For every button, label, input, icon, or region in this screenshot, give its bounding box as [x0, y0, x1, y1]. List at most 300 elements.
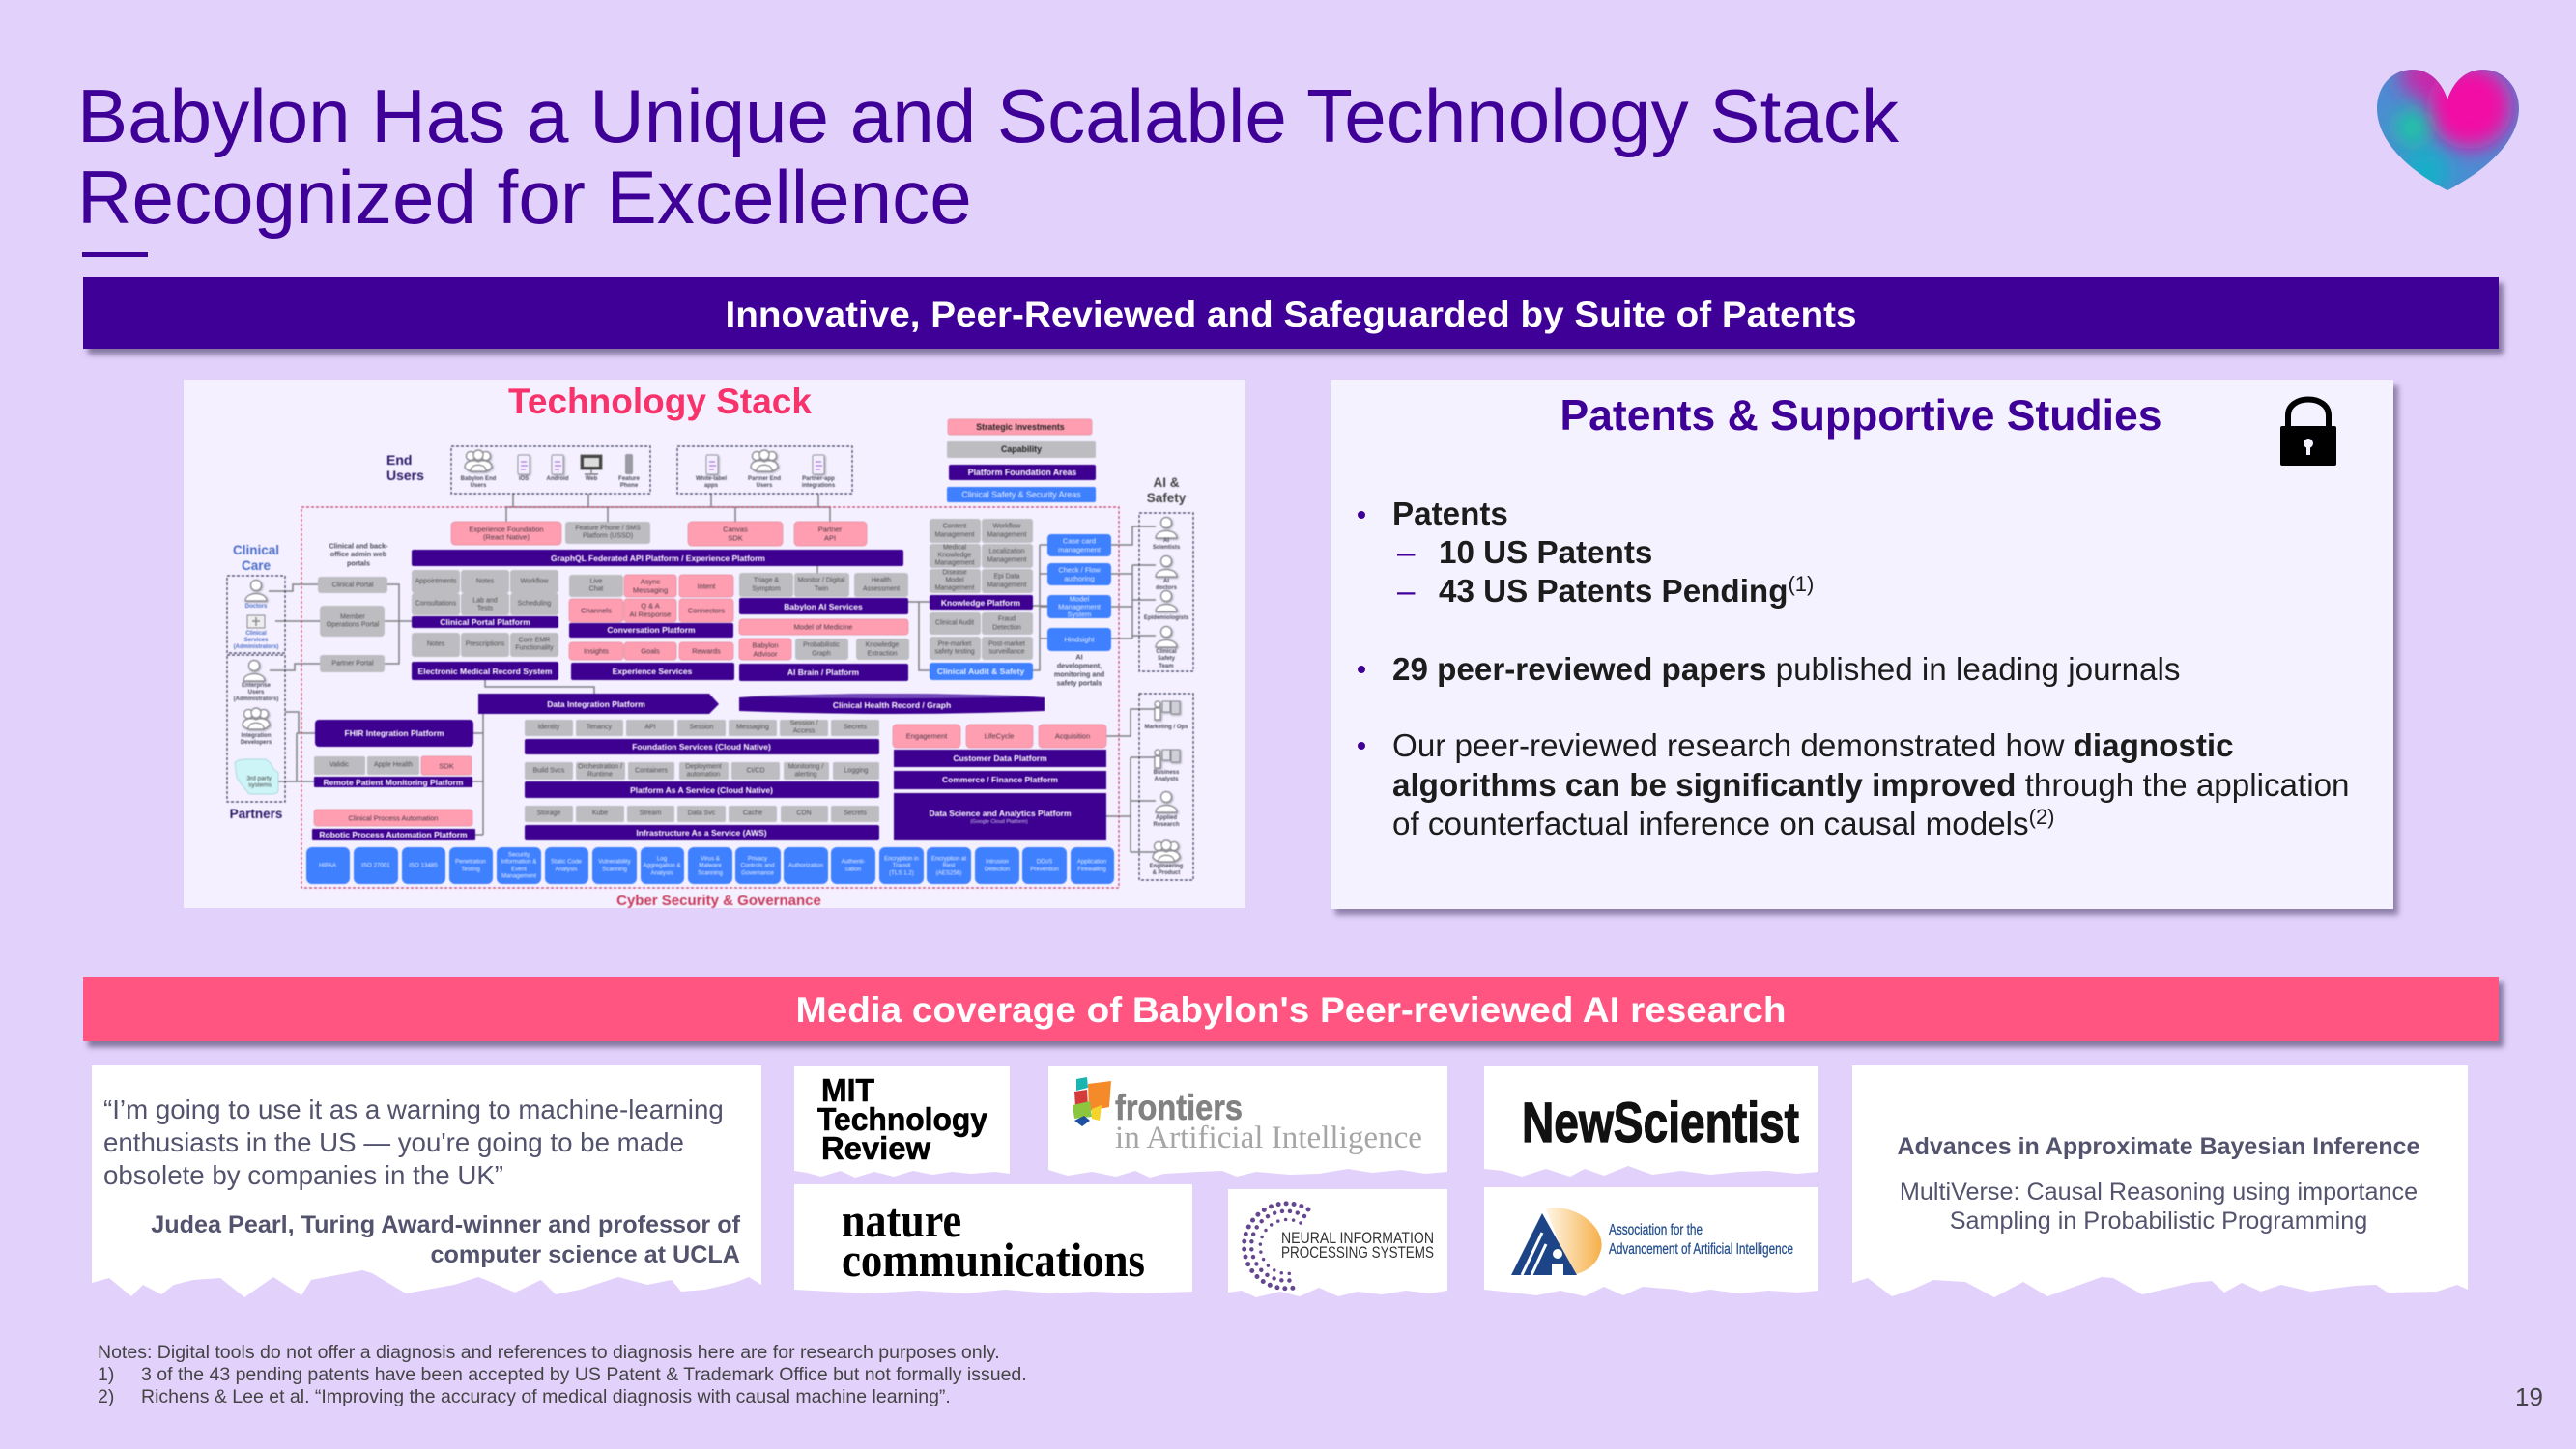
icon: clinical services — [234, 615, 278, 650]
cloud native services stack: automation — [687, 771, 720, 779]
customer data and analytics platforms — [893, 724, 1106, 840]
babylon AI services stack: Triage & — [754, 578, 779, 583]
cloud native services stack: Kube — [592, 810, 608, 817]
label: clinical care — [233, 543, 279, 573]
security and compliance row: Security — [508, 852, 530, 858]
customer data and analytics platforms: (Google Cloud Platform) — [970, 819, 1028, 825]
admin web portals: Clinical and back- — [329, 541, 388, 551]
security and compliance row: Privacy — [748, 856, 768, 862]
cloud native services stack: Identity — [538, 724, 560, 730]
cloud native services stack: Deployment — [685, 763, 722, 771]
knowledge platform stack: Fraud — [998, 616, 1016, 622]
connector lines — [269, 494, 1156, 852]
cloud native services stack: alerting — [795, 771, 817, 779]
knowledge platform stack: Management — [935, 585, 974, 591]
quote text: obsolete by companies in the UK” — [103, 1160, 503, 1190]
clinical portal platform stack: Appointments — [415, 578, 457, 585]
business users: Research — [1153, 822, 1180, 828]
security and compliance row: Authenti- — [842, 858, 865, 866]
knowledge platform stack: Clinical Audit & Safety — [937, 667, 1024, 676]
cloud native services stack: CI/CD — [746, 767, 765, 775]
quote text — [103, 1094, 724, 1190]
top platforms row — [412, 522, 903, 566]
clinical portal platform stack: Workflow — [521, 578, 549, 585]
cloud native services stack: Stream — [640, 810, 661, 817]
dashed group: babylon end users: Android — [547, 476, 569, 482]
dashed group: babylon end users — [451, 446, 650, 494]
card: Judea Pearl quote — [92, 1065, 761, 1297]
business users — [1139, 694, 1193, 880]
security and compliance row: Information & — [501, 858, 537, 866]
security and compliance row: HIPAA — [319, 862, 337, 869]
babylon AI services stack: AI Brain / Platform — [787, 668, 860, 677]
babylon AI services stack: Babylon — [752, 641, 779, 649]
AI development portals: development, — [1057, 661, 1102, 670]
knowledge platform stack: Management — [935, 560, 974, 566]
knowledge platform stack: Management — [987, 582, 1026, 589]
AI development portals: Hindsight — [1064, 636, 1096, 643]
dashed group: partner end users: integrations — [802, 483, 836, 489]
security and compliance row: Scanning — [698, 869, 723, 877]
dashed group: babylon end users: Web — [586, 476, 598, 482]
knowledge platform stack: Disease — [942, 570, 967, 576]
bullet: research — [1358, 728, 2350, 842]
clinical portal platform stack: Prescriptions — [466, 641, 505, 647]
AI and safety users: doctors — [1156, 585, 1178, 591]
cloud native services stack: CDN — [796, 810, 812, 817]
conversation platform stack: Insights — [584, 647, 609, 655]
security and compliance row: Management — [501, 873, 536, 879]
title accent rule — [82, 252, 148, 257]
security and compliance row: Rest — [943, 862, 956, 869]
top platforms row: GraphQL Federated API Platform / Experience Platform — [551, 554, 765, 563]
security and compliance row: Penetration — [455, 858, 486, 866]
babylon AI services stack: Monitor / Digital — [798, 578, 845, 583]
banner: media coverage — [83, 977, 2499, 1041]
security and compliance row: cation — [845, 866, 862, 873]
icon: enterprise users — [234, 661, 278, 702]
clinical care users — [227, 543, 285, 821]
dashed group: babylon end users: iOS — [519, 476, 529, 482]
knowledge platform stack: safety testing — [934, 649, 975, 655]
footnotes: Richens & Lee et al. “Improving the accuracy of medical diagnosis with causal machine learning”. — [141, 1386, 951, 1407]
cloud native services stack: Infrastructure As a Service (AWS) — [636, 828, 767, 838]
icon: integration developers: Developers — [241, 740, 272, 746]
security and compliance row: Malware — [699, 862, 722, 869]
dashed group: babylon end users: Users — [471, 483, 487, 489]
integration platforms: SDK — [439, 761, 454, 771]
security and compliance row: Detection — [985, 866, 1011, 873]
footnotes: 2) — [98, 1386, 114, 1407]
icon: enterprise users: Users — [248, 690, 265, 696]
data integration and health record: Clinical Health Record / Graph — [833, 700, 951, 710]
integration platforms: Apple Health — [374, 761, 413, 769]
clinical portal platform stack: Consultations — [415, 601, 457, 607]
conversation platform stack — [569, 575, 734, 680]
conversation platform stack: Connectors — [688, 607, 725, 614]
babylon AI services stack: Assessment — [863, 585, 900, 593]
knowledge platform stack: Localization — [989, 549, 1025, 554]
card: advances in approximate Bayesian inference — [1852, 1065, 2468, 1297]
AI development portals: AI — [1075, 653, 1083, 661]
customer data and analytics platforms: Commerce / Finance Platform — [942, 775, 1058, 784]
dashed group: partner end users: apps — [704, 483, 719, 489]
knowledge platform stack: Post-market — [988, 641, 1025, 647]
security and compliance row: Log — [657, 856, 668, 862]
security and compliance row: (TLS 1.2) — [889, 869, 914, 877]
AI and safety users: Epidemiologists — [1144, 615, 1189, 621]
security and compliance row: Encryption in — [884, 856, 919, 862]
conversation platform stack: Intent — [698, 582, 716, 591]
customer data and analytics platforms: Engagement — [906, 732, 948, 740]
bullet: patents: – — [1397, 535, 1416, 571]
conversation platform stack: Live — [590, 578, 603, 585]
logo: MIT Technology Review — [794, 1066, 1010, 1178]
babylon AI services stack: Knowledge — [866, 641, 899, 649]
admin web portals: Partner Portal — [331, 661, 374, 667]
cloud native services stack: Tenancy — [587, 724, 613, 730]
top platforms row: API — [824, 533, 836, 543]
cloud native services stack: Access — [793, 728, 816, 734]
icon: padlock — [2280, 400, 2336, 466]
cloud native services stack: Session — [690, 724, 714, 730]
label: AI and safety — [1147, 475, 1187, 505]
knowledge platform stack: Medical — [943, 545, 967, 551]
label: AI and safety: AI & — [1154, 475, 1180, 490]
cloud native services stack: Runtime — [587, 771, 613, 779]
icon: enterprise users: Enterprise — [242, 683, 271, 689]
top platforms row: SDK — [728, 533, 743, 543]
icon: integration developers — [241, 708, 272, 746]
security and compliance row: Prevention — [1030, 866, 1059, 873]
banner: innovative, peer-reviewed: Innovative, Peer-Reviewed and Safeguarded by Suite of Patents — [725, 295, 1857, 334]
clinical portal platform stack: Core EMR — [519, 638, 550, 643]
knowledge platform stack: Detection — [992, 624, 1021, 632]
clinical portal platform stack: Electronic Medical Record System — [418, 667, 553, 676]
data integration and health record: Data Integration Platform — [547, 699, 645, 709]
top platforms row: (React Native) — [483, 533, 530, 541]
logo: association for the advancement of artificial intelligence — [1484, 1187, 1818, 1296]
data integration and health record — [478, 694, 1045, 714]
babylon AI services stack: Symptom — [752, 585, 781, 593]
top platforms row: Partner — [818, 526, 843, 533]
logo: nature communications: communications — [842, 1233, 1145, 1287]
panel: technology stack diagram — [184, 380, 1245, 909]
security and compliance row: Scanning — [602, 866, 627, 873]
third party systems: systems — [248, 782, 272, 788]
panel: patents and supportive studies — [1331, 380, 2393, 909]
AI and safety users — [1139, 475, 1193, 671]
AI development portals: authoring — [1064, 574, 1095, 583]
AI development portals: Case card — [1063, 537, 1096, 545]
stack diagram — [227, 419, 1193, 909]
bullet: research: of counterfactual inference on causal models — [1392, 807, 2029, 842]
third party systems: 3rd party — [246, 775, 272, 782]
title: Recognized for Excellence — [77, 155, 972, 240]
knowledge platform stack: Workflow — [993, 524, 1021, 529]
clinical portal platform stack: Notes — [427, 641, 445, 647]
logo: neural information processing systems — [1228, 1189, 1447, 1297]
admin web portals — [318, 541, 388, 672]
page number: 19 — [2515, 1382, 2543, 1411]
bullet: patents: Patents — [1392, 497, 1508, 532]
security and compliance row: Encryption at — [931, 856, 966, 862]
AI development portals: Check / Flow — [1058, 566, 1101, 574]
banner: media coverage: Media coverage of Babylon's Peer-reviewed AI research — [796, 990, 1786, 1030]
card: advances in approximate Bayesian inference: Sampling in Probabilistic Programming — [1950, 1208, 2367, 1235]
integration platforms: Robotic Process Automation Platform — [319, 830, 468, 839]
bullet: patents: – — [1397, 574, 1416, 610]
cloud native services stack: Build Svcs — [533, 767, 565, 775]
logo: MIT Technology Review: Technology — [817, 1101, 988, 1137]
third party systems — [235, 759, 278, 794]
icon: Babylon gradient heart logo — [2377, 70, 2519, 190]
clinical portal platform stack: Lab and — [472, 597, 498, 605]
icon: doctors: Doctors — [245, 604, 268, 610]
AI development portals: Model — [1070, 595, 1090, 603]
dashed group: partner end users: Partner End — [748, 476, 781, 482]
knowledge platform stack — [930, 519, 1033, 680]
end users — [386, 446, 852, 494]
security and compliance row: Authorization — [788, 862, 824, 869]
cloud native services stack: Session / — [790, 721, 817, 726]
attribution: computer science at UCLA — [430, 1241, 740, 1268]
dashed group: partner end users — [677, 446, 852, 494]
attribution: Judea Pearl, Turing Award-winner and professor of — [151, 1211, 741, 1238]
label: end users: Users — [386, 468, 424, 483]
footnotes: Notes: Digital tools do not offer a diagnosis and references to diagnosis here are for research purposes only. — [98, 1342, 1000, 1363]
dashed group: babylon end users: Phone — [620, 483, 639, 489]
logo: New Scientist: NewScientist — [1522, 1092, 1799, 1154]
icon: clinical services: Clinical — [245, 631, 267, 637]
security and compliance row: Governance — [741, 869, 774, 877]
cloud native services stack: Secrets — [844, 810, 867, 817]
dashed group: babylon end users: Feature — [618, 476, 640, 482]
title — [77, 73, 1900, 240]
label: end users — [386, 452, 424, 483]
conversation platform stack: Channels — [581, 607, 612, 614]
dashed group: clinical care — [227, 576, 285, 653]
dashed group: partner end users: Users — [757, 483, 773, 489]
knowledge platform stack: Content — [943, 524, 966, 529]
logo: nature communications: nature — [842, 1193, 961, 1247]
conversation platform stack: Q & A — [641, 601, 660, 611]
label: AI and safety: Safety — [1147, 491, 1187, 505]
customer data and analytics platforms: Acquisition — [1055, 732, 1090, 740]
admin web portals: Operations Portal — [327, 622, 380, 628]
integration platforms — [312, 720, 475, 840]
cloud native services stack: Containers — [635, 767, 668, 775]
clinical portal platform stack: Functionality — [515, 645, 554, 651]
babylon AI services stack: Twin — [815, 585, 828, 593]
babylon AI services stack — [739, 573, 909, 681]
card: advances in approximate Bayesian inference: MultiVerse: Causal Reasoning using importance — [1900, 1179, 2418, 1206]
logo: nature communications — [794, 1184, 1192, 1293]
top platforms row: Feature Phone / SMS — [575, 526, 641, 531]
babylon AI services stack: Probabilistic — [803, 641, 840, 649]
knowledge platform stack: Model — [945, 578, 964, 583]
integration platforms: Validic — [329, 761, 350, 769]
security and compliance row: Aggregation & — [643, 862, 681, 869]
conversation platform stack: Messaging — [633, 585, 668, 595]
knowledge platform stack: Management — [987, 556, 1026, 564]
AI development portals: Management — [1058, 603, 1102, 611]
security and compliance row: Analysis — [650, 869, 673, 877]
cyber security dashed boundary — [301, 507, 1119, 888]
logo: neural information processing systems: PROCESSING SYSTEMS — [1281, 1243, 1434, 1262]
legend — [947, 419, 1096, 502]
security and compliance row: ISO 13485 — [409, 862, 438, 869]
heading: technology stack: Technology Stack — [508, 382, 812, 421]
banner: innovative, peer-reviewed — [83, 277, 2499, 349]
label: partners: Partners — [230, 807, 282, 821]
admin web portals: portals — [347, 558, 370, 568]
AI and safety users: Team — [1159, 664, 1174, 669]
knowledge platform stack: Epi Data — [994, 574, 1020, 580]
bullet: patents: 43 US Patents Pending — [1439, 574, 1788, 610]
AI and safety users: AI — [1163, 579, 1169, 584]
security and compliance row: (AES256) — [936, 869, 961, 877]
conversation platform stack: Goals — [641, 647, 660, 655]
knowledge platform stack: Knowledge — [938, 553, 971, 558]
AI development portals: monitoring and — [1054, 670, 1104, 678]
logo: association for the advancement of artificial intelligence: Association for the — [1609, 1222, 1703, 1238]
legend: Strategic Investments — [976, 422, 1065, 432]
cloud native services stack: Storage — [537, 810, 560, 817]
AI development portals: management — [1058, 545, 1102, 554]
security and compliance row: Analysis — [555, 866, 578, 873]
babylon AI services stack: Model of Medicine — [794, 622, 852, 632]
dashed group: partners — [227, 655, 285, 802]
logo: neural information processing systems: NEURAL INFORMATION — [1281, 1229, 1434, 1247]
heading: patents and supportive studies: Patents & Supportive Studies — [1560, 392, 2162, 440]
logo: association for the advancement of artificial intelligence: Advancement of Artificial Intelligence — [1609, 1241, 1793, 1258]
babylon AI services stack: Advisor — [753, 649, 778, 659]
conversation platform stack: Chat — [589, 585, 603, 593]
clinical portal platform stack: Scheduling — [518, 601, 551, 607]
cloud native services stack: Logging — [844, 767, 869, 775]
AI development portals: System — [1067, 611, 1092, 618]
bullet: research: algorithms can be significantly improved through the application — [1392, 768, 2350, 804]
AI and safety users: Scientists — [1153, 545, 1181, 551]
knowledge platform stack: Knowledge Platform — [941, 598, 1021, 608]
attribution — [151, 1211, 741, 1268]
clinical portal platform stack: Notes — [476, 578, 495, 585]
logo: frontiers in Artificial Intelligence — [1048, 1066, 1447, 1178]
babylon AI services stack: Health — [872, 578, 891, 583]
quote text: “I’m going to use it as a warning to machine-learning — [103, 1094, 724, 1124]
title: Babylon Has a Unique and Scalable Technology Stack — [77, 73, 1900, 158]
top platforms row: Canvas — [723, 526, 748, 533]
security and compliance row: Transit — [893, 862, 911, 869]
card: advances in approximate Bayesian inference: Advances in Approximate Bayesian Inference — [1898, 1133, 2420, 1160]
babylon AI services stack: Graph — [812, 651, 831, 657]
security and compliance row: Controls and — [740, 862, 775, 869]
security and compliance row: Firewalling — [1077, 866, 1106, 873]
dashed group: partner end users: White-label — [696, 476, 727, 482]
footnotes: 1) — [98, 1364, 114, 1385]
label: clinical care: Care — [242, 558, 271, 573]
integration platforms: Remote Patient Monitoring Platform — [324, 778, 464, 787]
AI and safety users: Clinical — [1156, 649, 1177, 655]
knowledge platform stack: Management — [935, 531, 974, 539]
customer data and analytics platforms: Data Science and Analytics Platform — [929, 809, 1072, 818]
icon: enterprise users: (Administrators) — [234, 696, 278, 702]
business users: Analysts — [1154, 777, 1179, 782]
cloud native services stack: Messaging — [736, 724, 769, 730]
security and compliance row: ISO 27001 — [361, 862, 390, 869]
cloud native services stack — [525, 720, 879, 840]
security and compliance row: Testing — [461, 866, 480, 873]
business users: & Product — [1153, 870, 1180, 876]
dotted arc mark — [1245, 1204, 1308, 1289]
quote text: enthusiasts in the US — you're going to be made — [103, 1127, 684, 1157]
conversation platform stack: AI Response — [630, 611, 671, 618]
legend: Platform Foundation Areas — [968, 468, 1076, 477]
integration platforms: Clinical Process Automation — [349, 813, 438, 823]
footnotes: 3 of the 43 pending patents have been accepted by US Patent & Trademark Office but not formally issued. — [141, 1364, 1027, 1385]
icon: integration developers: Integration — [242, 733, 272, 739]
clinical portal platform stack: Tests — [477, 605, 494, 612]
AI and safety users: Safety — [1158, 656, 1176, 662]
bullet: patents — [1358, 497, 1814, 610]
cloud native services stack: Monitoring / — [788, 763, 823, 771]
top platforms row: Platform (USSD) — [583, 533, 633, 539]
security and compliance row: Event — [511, 866, 527, 873]
dashed group: partner end users: Partner-app — [802, 476, 835, 482]
cloud native services stack: API — [644, 724, 656, 730]
integration platforms: FHIR Integration Platform — [345, 728, 444, 738]
clinical portal platform stack — [412, 570, 558, 680]
label: clinical care: Clinical — [233, 543, 279, 557]
cloud native services stack: Data Svc — [688, 810, 716, 817]
babylon AI services stack: Extraction — [867, 651, 898, 657]
icon: doctors — [245, 580, 268, 610]
legend: Capability — [1001, 444, 1042, 454]
admin web portals: Member — [340, 614, 365, 620]
knowledge platform stack: surveillance — [989, 649, 1025, 655]
security and compliance row — [306, 847, 1114, 884]
icon: clinical services: (Administrators) — [234, 644, 278, 650]
AI and safety users: AI — [1163, 538, 1169, 544]
cloud native services stack: Orchestration / — [578, 763, 622, 771]
security and compliance row: Static Code — [551, 858, 583, 866]
logo: frontiers in Artificial Intelligence: frontiers — [1115, 1088, 1243, 1127]
dashed group: babylon end users: Babylon End — [461, 476, 497, 482]
bullet: peer-reviewed papers: 29 peer-reviewed papers published in leading journals — [1392, 652, 2180, 688]
clinical portal platform stack: Clinical Portal Platform — [440, 617, 530, 627]
security and compliance row: Intrusion — [986, 858, 1009, 866]
conversation platform stack: Rewards — [692, 647, 721, 655]
cloud native services stack: Cache — [743, 810, 762, 817]
label: cyber security and governance: Cyber Security & Governance — [616, 893, 821, 909]
bullet: research: Our peer-reviewed research demonstrated how diagnostic — [1392, 728, 2234, 764]
business users: Marketing / Ops — [1144, 724, 1188, 730]
security and compliance row: Vulnerability — [598, 858, 632, 866]
footnotes — [98, 1342, 1027, 1407]
cloud native services stack: Foundation Services (Cloud Native) — [632, 742, 771, 752]
bullet: patents: 10 US Patents — [1439, 535, 1652, 571]
knowledge platform stack: Pre-market — [938, 641, 971, 647]
logo: New Scientist — [1484, 1066, 1818, 1177]
top platforms row: Experience Foundation — [469, 526, 544, 533]
AI development portals: safety portals — [1057, 678, 1102, 688]
conversation platform stack: Conversation Platform — [607, 625, 696, 635]
logo: MIT Technology Review: MIT — [821, 1072, 874, 1108]
AI development portals — [1047, 534, 1111, 688]
babylon AI services stack: Babylon AI Services — [784, 602, 863, 611]
icon: clinical services: Services — [244, 638, 269, 643]
